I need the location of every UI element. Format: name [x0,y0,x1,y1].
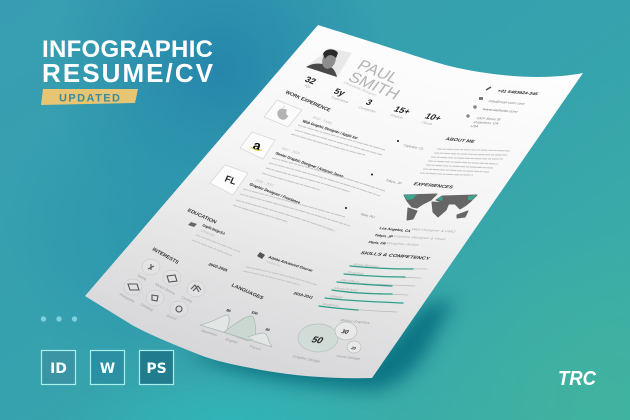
contact details: www.website.com [481,108,519,114]
job card: apple: 2010 - Today [311,116,333,125]
experience locations: Graphic Artist [385,242,420,247]
icon: apple logo [278,106,288,120]
badge: W [90,350,124,384]
heading: work experience: WORK EXPERIENCE [284,90,332,114]
education entries: Adobe Advanced Course [267,255,315,273]
photo [306,48,352,77]
stats row [303,75,444,126]
skill bars: Photoshop [346,271,365,275]
bubble chart: Front Design [335,355,361,361]
interests icons: Soccer [165,314,178,321]
languages area chart: French [248,345,262,351]
interests icons: Photography [118,293,136,304]
interests icons: Motor Drives [154,283,176,296]
heading: skills and competency: SKILLS & COMPETENCY [359,251,432,262]
experience locations: Los Angeles, CA [378,226,412,233]
job card: apple: Cupertino, CA [402,144,425,151]
languages area chart: English [224,338,239,345]
stats row: 15+ [392,105,413,116]
heading: education: EDUCATION [186,208,218,225]
languages area chart [199,308,272,351]
job card: amazon [240,132,403,196]
marker: location dot [345,207,347,209]
interests icons: Cycling [180,296,193,303]
badge: PS [140,350,174,384]
job card: freelance: FL [223,174,238,187]
name: SMITH [345,70,403,103]
contact details: +01 5483924-345 [496,89,540,96]
icon: camera [128,284,139,290]
stats row: 10+ [423,112,444,123]
name: Infographic Designer [342,81,378,97]
contact details: USA [469,125,480,128]
stats row: Projects [389,114,404,120]
badge: PS: PS [146,361,167,377]
badge: ID [42,350,76,384]
education entries: University [199,229,216,238]
job card: freelance: Graphic Designer / Freelance [248,182,302,205]
title [42,36,214,88]
experience locations [367,226,457,247]
experience locations: Creative Designer & Head [392,235,447,241]
badge: W: W [100,361,115,377]
job card: amazon: a [251,138,264,153]
bubble chart [291,319,371,363]
interests icons [118,259,205,321]
job card: amazon: Senior Graphic Designer / Amazon Japan [274,151,346,179]
skill bars: Adobe Illustrator [352,263,381,268]
paper [85,25,583,378]
skill bars: After Effects [339,279,361,284]
heading: about me: ABOUT ME [444,137,477,145]
icon: website [473,105,477,109]
interests icons: Climbing [139,303,154,312]
skill bars: Wordpress [321,303,341,308]
interests icons: Swing [136,274,147,281]
skill bars: InDesign [328,295,344,299]
marker: location dot [397,140,399,142]
languages area chart: 80 [225,308,232,313]
icon: bicycle [191,285,201,292]
stats row: Clients [420,121,434,126]
title: INFOGRAPHIC [42,36,213,63]
world map [404,194,477,220]
job card: apple: Web Graphic Designer / Apple Inc [301,119,360,140]
bubble chart: 50 [310,335,325,346]
about me paragraph [420,149,510,175]
languages area chart: 30 [264,327,271,332]
job card: freelance [210,165,376,231]
icon: address pin [466,114,470,118]
badge: ID: ID [50,361,67,377]
stats row: 5y [332,87,347,98]
heading: interests: INTERESTS [151,247,180,266]
bubble chart: 20 [350,345,358,351]
education entries: Graphic Design B.A [201,223,227,236]
icon: climbing [152,295,158,301]
contact details: Cupertino, CA [472,121,500,125]
bubble chart: Graphic Design [291,355,321,363]
icon: email [479,97,483,100]
carousel dots [41,316,77,322]
contact details [466,87,540,128]
education entries: Adobe Inc [264,260,282,268]
languages area chart: Japanese [199,329,218,337]
heading: experiences: EXPERIENCES [412,182,455,190]
job card: apple [264,100,425,155]
stats row: 32 [303,75,318,86]
name [342,58,403,103]
education entries: 2002-2005 [207,262,230,273]
marker: location dot [371,174,373,176]
icon: soccer ball [176,306,182,312]
contact details: info@mail.com.com [487,100,526,106]
experience locations: Paris, FR [367,240,387,246]
paper shadow [185,300,455,390]
icon: graduation cap [188,222,197,227]
resume sheet [85,25,583,378]
icon: phone [486,87,491,90]
experience locations: Web Designer & CMO [410,228,457,233]
title: RESUME/CV [42,58,214,88]
name: PAUL [354,58,402,87]
experience locations: Tokyo, JP [373,233,395,239]
badge: updated: UPDATED [59,92,120,104]
logo: TRC: TRC [558,368,597,390]
education entries: 2010-2011 [292,291,315,300]
skill bars [319,263,427,312]
badge: updated [41,89,138,105]
icon: motorcycle [167,275,177,282]
job card: freelance: New, AU [359,213,376,219]
icon: graduation cap [257,252,265,259]
stats row: Companies [357,106,377,114]
job card: amazon: Tokyo, JP [384,179,403,186]
stats row: 3 [364,98,375,107]
bubble chart: 30 [340,329,350,336]
job card: freelance: 2005 - 2007 [254,179,275,188]
heading: languages: LANGUAGES [230,283,265,301]
languages area chart: 100 [250,310,259,316]
stats row: Age [303,84,312,89]
skill bars: Microsoft Word [333,287,359,292]
job card: amazon: 2007 - 2010 [280,147,301,156]
icon: amazon smile [251,147,262,150]
bubble chart: Motion Graphics [339,319,371,325]
icon: swing [148,264,154,270]
contact details: 1024 Street St [475,117,502,121]
stats row: Experience [330,96,349,104]
education entries [188,222,317,300]
